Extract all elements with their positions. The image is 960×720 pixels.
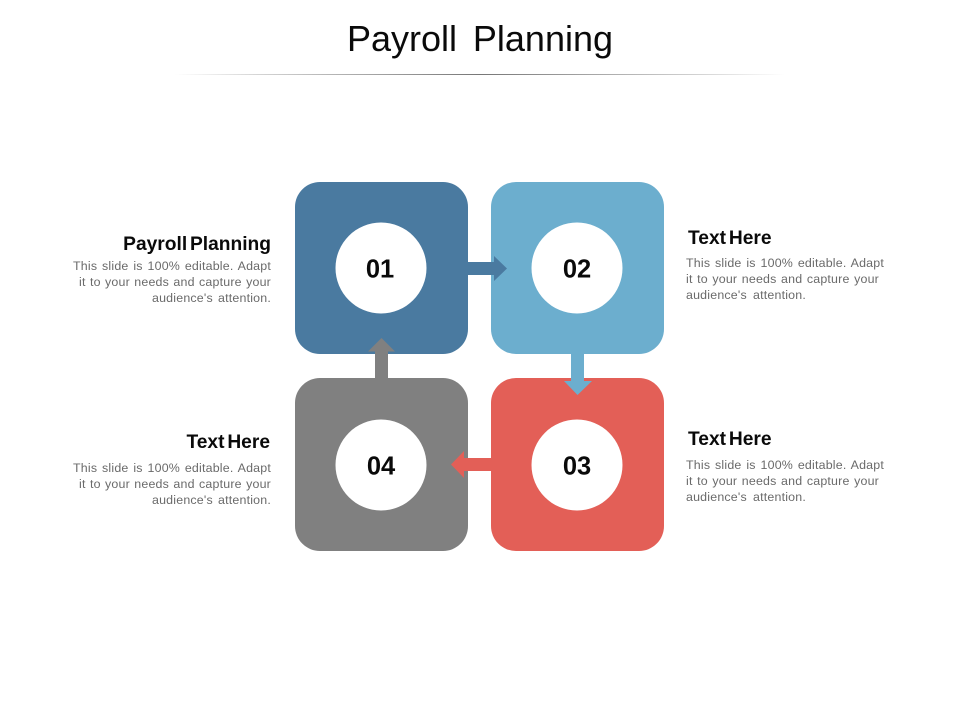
description: right bottom <box>686 458 884 504</box>
badge 01 <box>336 222 426 314</box>
description: Payroll Planning: it to your needs and capture your <box>79 275 271 289</box>
description: right top: it to your needs and capture your <box>686 272 879 286</box>
badge 04: 04 <box>367 452 396 480</box>
description: left bottom: This slide is 100% editable. Adapt <box>73 461 271 475</box>
badge 03 <box>532 420 622 510</box>
description: right top: audience's attention. <box>686 288 806 302</box>
panel 02 <box>491 182 664 354</box>
badge 04 <box>336 420 426 510</box>
description: Payroll Planning: This slide is 100% editable. Adapt <box>73 259 271 273</box>
panel 04 <box>295 378 468 551</box>
description: right bottom: audience's attention. <box>686 490 806 504</box>
description: right top: This slide is 100% editable. Adapt <box>686 256 884 270</box>
heading: Payroll Planning: Payroll Planning <box>123 234 271 254</box>
description: right top <box>686 256 884 302</box>
description: right bottom: This slide is 100% editable. Adapt <box>686 458 884 472</box>
description: Payroll Planning: audience's attention. <box>152 291 271 305</box>
badge 03: 03 <box>563 452 591 480</box>
description: left bottom: it to your needs and capture your <box>79 477 271 491</box>
description: right bottom: it to your needs and capture your <box>686 474 879 488</box>
arrow: 04 to 01 <box>368 338 395 378</box>
panel 01 <box>295 182 468 354</box>
description: Payroll Planning <box>73 259 271 305</box>
badge 02: 02 <box>563 256 591 284</box>
text block: Text Here (right bottom) <box>686 428 884 504</box>
heading: Text Here: Text Here <box>688 228 772 248</box>
arrow: 03 to 04 <box>451 451 491 478</box>
heading: Text Here: Text Here <box>186 432 270 452</box>
panel 03 <box>491 378 664 551</box>
text block: Payroll Planning (left top) <box>73 234 271 305</box>
heading: Text Here: Text Here <box>688 428 772 450</box>
description: left bottom: audience's attention. <box>152 493 271 507</box>
text block: Text Here (left bottom) <box>73 432 271 507</box>
title: Payroll Planning <box>347 18 613 59</box>
badge 01: 01 <box>366 256 394 284</box>
text block: Text Here (right top) <box>686 228 884 302</box>
badge 02 <box>532 222 622 314</box>
description: left bottom <box>73 461 271 507</box>
arrow: 01 to 02 <box>468 256 507 281</box>
arrow: 02 to 03 <box>564 354 592 395</box>
